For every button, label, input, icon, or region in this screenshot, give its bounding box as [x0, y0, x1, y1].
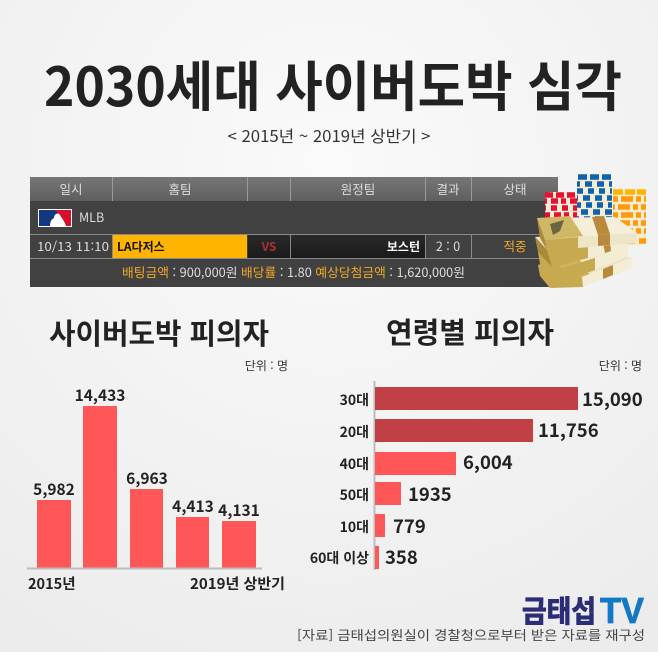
- table header: 결과: [436, 179, 460, 198]
- bar chart: victims by age: [310, 381, 643, 570]
- bar chart: victims by age: 30대: [340, 390, 369, 410]
- match row: 10/13 11:10: [37, 238, 109, 255]
- bar chart: victims by age: 358: [385, 544, 418, 570]
- bar chart: victims by age: 20대: [340, 422, 369, 442]
- logo: TV channel: 금태섭: [522, 587, 596, 631]
- upper middle stack: [535, 230, 628, 267]
- table header: 원정팀: [341, 179, 375, 198]
- table header: 일시: [59, 179, 83, 198]
- bar chart: victims by age: 779: [393, 513, 426, 539]
- bar chart: yearly victims: 14,433: [75, 384, 125, 406]
- match row: 보스턴: [387, 238, 420, 255]
- bar chart: yearly victims: [27, 384, 285, 594]
- money stacks: [535, 216, 637, 288]
- bar 2015: [37, 500, 71, 568]
- match row: 2 : 0: [436, 236, 460, 255]
- bottom stack: [538, 250, 632, 288]
- unit label right: 단위 : 명: [599, 357, 642, 374]
- bar chart: victims by age: 1935: [408, 481, 452, 507]
- match row: LA다저스: [117, 238, 165, 255]
- orange chips: [613, 189, 646, 246]
- red chips: [545, 192, 579, 226]
- bar chart: victims by age: 15,090: [582, 386, 643, 412]
- table header: 홈팀: [168, 179, 192, 198]
- panel: betting slip: [30, 177, 558, 287]
- logo: TV channel: [522, 587, 644, 631]
- bar chart: yearly victims: 6,963: [126, 467, 168, 489]
- match row: VS: [261, 238, 276, 255]
- bar chart: victims by age: 60대 이상: [310, 548, 369, 568]
- league row: MLB: [38, 207, 104, 227]
- bar chart: victims by age: 40대: [340, 454, 369, 474]
- league row: MLB: MLB: [79, 207, 104, 226]
- bar chart: yearly victims: 2015년: [28, 573, 76, 594]
- unit label left: 단위 : 명: [245, 357, 288, 374]
- bar chart: yearly victims: 2019년 상반기: [190, 573, 285, 594]
- betting summary: 배팅금액 : 900,000원 배당률 : 1.80 예상당첨금액 : 1,620,000원: [122, 262, 465, 281]
- bar chart: victims by age: 11,756: [538, 417, 599, 443]
- bar chart: yearly victims: 5,982: [33, 478, 75, 500]
- bar 2017: [130, 489, 163, 568]
- top stack: [537, 216, 637, 250]
- heading: cyber gambling victims: 사이버도박 피의자: [49, 311, 269, 353]
- heading: victims by age: 연령별 피의자: [386, 310, 554, 352]
- bar chart: yearly victims: 4,131: [218, 499, 260, 521]
- title: 2030세대 사이버도박 심각: [44, 43, 622, 122]
- bar 2019 first half: [222, 521, 256, 568]
- table header: [30, 177, 558, 201]
- bar 2016: [83, 406, 117, 568]
- table header: 상태: [503, 179, 527, 198]
- bar chart: victims by age: 6,004: [463, 449, 513, 475]
- bar chart: victims by age: 10대: [340, 517, 369, 537]
- bar 2018: [176, 517, 209, 568]
- lower middle stack: [538, 242, 628, 282]
- logo: TV channel: TV: [600, 590, 644, 631]
- source note: [자료] 금태섭의원실이 경찰청으로부터 받은 자료를 재구성: [297, 625, 645, 644]
- match row: [37, 235, 527, 258]
- bar chart: victims by age: 50대: [340, 485, 369, 505]
- blue chips: [577, 175, 612, 227]
- subtitle: < 2015년 ~ 2019년 상반기 >: [228, 123, 431, 147]
- match row: 적중: [503, 236, 527, 255]
- bar chart: yearly victims: 4,413: [172, 495, 214, 517]
- icon: casino chips and money stacks: [535, 175, 646, 288]
